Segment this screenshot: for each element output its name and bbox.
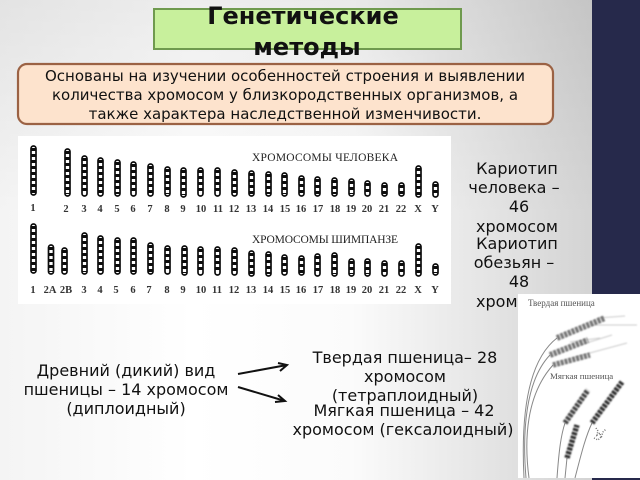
chimpanzee chromosome numbers: 5 xyxy=(113,285,119,296)
human chromosome numbers: X xyxy=(414,204,422,215)
right dark band xyxy=(592,0,640,480)
chimpanzee chromosome numbers: 19 xyxy=(346,285,356,296)
description box: также характера наследственной изменчивости. xyxy=(89,105,481,123)
durum wheat text xyxy=(312,348,497,405)
durum wheat text: Твердая пшеница– 28 xyxy=(312,348,497,367)
chimpanzee chromosome numbers: 18 xyxy=(330,285,340,296)
human chromosome numbers xyxy=(30,203,439,215)
chimpanzee chromosome numbers: 2B xyxy=(60,285,72,296)
human chromosome numbers: 18 xyxy=(330,204,340,215)
human chromosome numbers: 7 xyxy=(147,204,153,215)
wheat ears xyxy=(550,318,622,458)
description box: количества хромосом у близкородственных организмов, а xyxy=(52,86,518,104)
monkey karyotype text: обезьян – xyxy=(474,253,554,272)
description box xyxy=(18,64,553,124)
chimpanzee chromosome numbers: 22 xyxy=(396,285,406,296)
arrow: to durum wheat xyxy=(238,363,287,374)
title box xyxy=(154,2,461,61)
human chromosome numbers: 10 xyxy=(196,204,206,215)
human chromosome numbers: Y xyxy=(431,204,439,215)
chart heading: chimpanzee chromosomes: ХРОМОСОМЫ ШИМПАНЗЕ xyxy=(252,234,398,246)
chimpanzee chromosome numbers: 15 xyxy=(280,285,290,296)
chimpanzee chromosome numbers: 4 xyxy=(97,285,103,296)
chimpanzee chromosome numbers xyxy=(30,285,439,296)
description box: Основаны на изучении особенностей строения и выявлении xyxy=(45,67,525,85)
human chromosome numbers: 15 xyxy=(280,204,290,215)
human chromosome numbers: 4 xyxy=(97,204,103,215)
title box: Генетические xyxy=(207,2,399,30)
human karyotype text xyxy=(468,159,560,236)
chimpanzee chromosome numbers: Y xyxy=(431,285,439,296)
human chromosome numbers: 19 xyxy=(346,204,356,215)
chimpanzee chromosome numbers: X xyxy=(414,285,422,296)
human chromosome numbers: 21 xyxy=(379,204,389,215)
soft wheat text xyxy=(293,401,513,439)
chimpanzee chromosome numbers: 13 xyxy=(246,285,256,296)
monkey karyotype text: Кариотип xyxy=(476,234,558,253)
human chromosome numbers: 14 xyxy=(263,204,274,215)
durum wheat text: (тетраплоидный) xyxy=(332,386,478,405)
human chromosome numbers: 20 xyxy=(362,204,372,215)
human chromosome numbers: 8 xyxy=(164,204,170,215)
ancient wheat text: Древний (дикий) вид xyxy=(37,361,215,380)
human chromosome numbers: 2 xyxy=(63,204,69,215)
chimpanzee chromosome numbers: 17 xyxy=(313,285,323,296)
wheat awns xyxy=(570,316,637,357)
ancient wheat text: (диплоидный) xyxy=(66,399,186,418)
chimpanzee chromosome numbers: 10 xyxy=(196,285,206,296)
human chromosome numbers: 16 xyxy=(296,204,306,215)
human chromosome numbers: 5 xyxy=(114,204,120,215)
chimpanzee chromosome numbers: 21 xyxy=(379,285,389,296)
monkey karyotype text: хромосом xyxy=(476,292,558,311)
human chromosome numbers: 6 xyxy=(130,204,136,215)
wheat grains xyxy=(594,428,606,440)
chimpanzee chromosome numbers: 11 xyxy=(212,285,222,296)
ancient wheat text: пшеницы – 14 хромосом xyxy=(24,380,228,399)
chimpanzee chromosome numbers: 7 xyxy=(146,285,152,296)
wheat stems xyxy=(523,338,592,478)
human chromosome numbers: 17 xyxy=(313,204,323,215)
human chromosome numbers: 1 xyxy=(30,203,36,214)
chimpanzee chromosome numbers: 2A xyxy=(44,285,57,296)
human chromosome numbers: 9 xyxy=(180,204,186,215)
chimpanzee chromosome numbers: 16 xyxy=(296,285,306,296)
human chromosome numbers: 12 xyxy=(229,204,239,215)
soft wheat text: хромосом (гексалоидный) xyxy=(293,420,513,439)
wheat illustration panel xyxy=(518,294,640,478)
human karyotype text: 46 xyxy=(509,197,529,216)
chimpanzee chromosome numbers: 8 xyxy=(164,285,170,296)
human karyotype text: хромосом xyxy=(476,217,558,236)
human chromosomes row xyxy=(31,146,438,197)
chart heading: human chromosomes: ХРОМОСОМЫ ЧЕЛОВЕКА xyxy=(252,152,399,164)
soft wheat text: Мягкая пшеница – 42 xyxy=(313,401,495,420)
chimpanzee chromosome numbers: 20 xyxy=(362,285,372,296)
ancient wheat text xyxy=(24,361,228,418)
chimpanzee chromosome numbers: 6 xyxy=(130,285,136,296)
human chromosome numbers: 13 xyxy=(246,204,256,215)
monkey karyotype text: 48 xyxy=(509,272,529,291)
chimpanzee chromosomes row xyxy=(31,224,438,276)
human karyotype text: человека – xyxy=(468,178,560,197)
human karyotype text: Кариотип xyxy=(476,159,558,178)
wheat caption: durum: Твердая пшеница xyxy=(528,298,595,308)
human chromosome numbers: 22 xyxy=(396,204,406,215)
arrow: to soft wheat xyxy=(238,387,285,402)
title box: методы xyxy=(253,33,361,61)
monkey karyotype text xyxy=(474,234,558,311)
human chromosome numbers: 11 xyxy=(213,204,223,215)
wheat caption: soft: Мягкая пшеница xyxy=(550,371,613,381)
chimpanzee chromosome numbers: 1 xyxy=(30,285,36,296)
chimpanzee chromosome numbers: 9 xyxy=(180,285,186,296)
chimpanzee chromosome numbers: 12 xyxy=(229,285,239,296)
chromosome chart panel xyxy=(18,136,451,304)
chimpanzee chromosome numbers: 3 xyxy=(81,285,87,296)
chimpanzee chromosome numbers: 14 xyxy=(263,285,274,296)
durum wheat text: хромосом xyxy=(364,367,446,386)
human chromosome numbers: 3 xyxy=(81,204,87,215)
